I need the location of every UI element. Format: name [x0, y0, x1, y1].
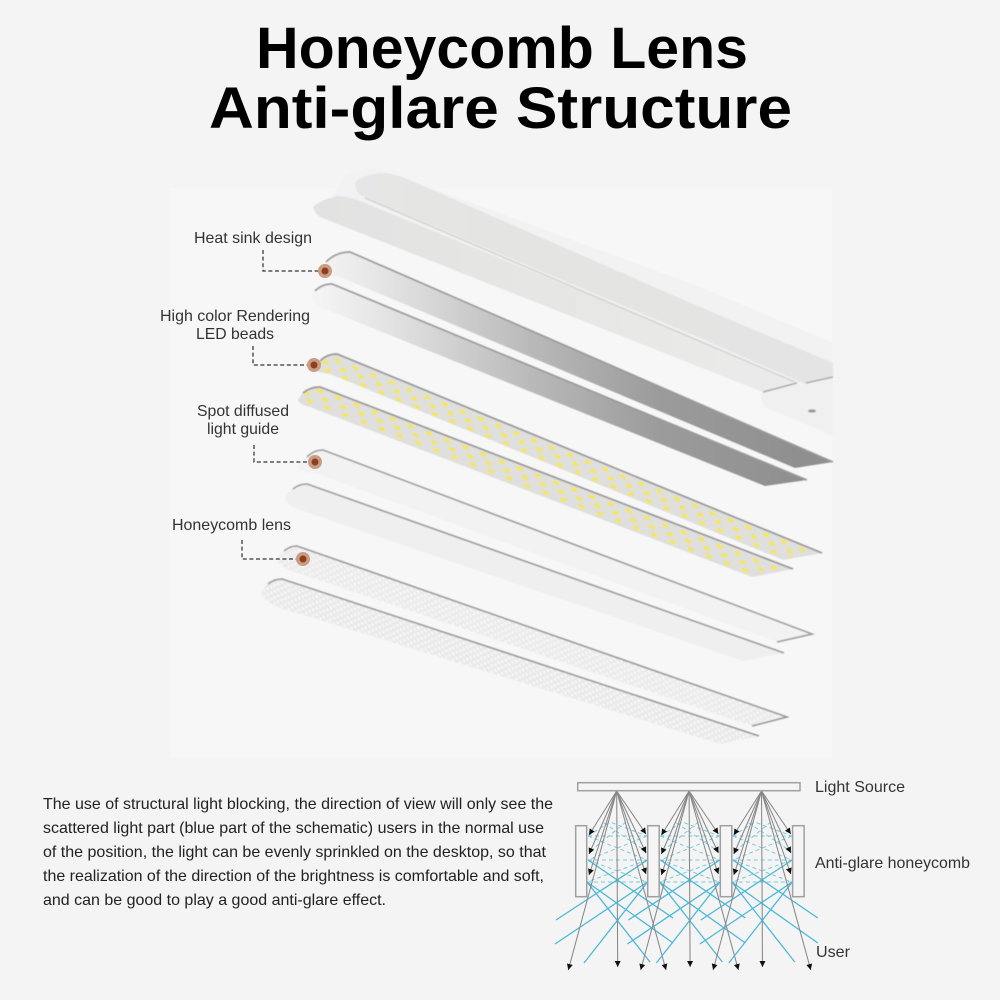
description paragraph: and can be good to play a good anti-glare effect. — [43, 892, 386, 909]
callout: LED beads: LED beads — [196, 326, 274, 343]
schematic labels: User — [816, 944, 851, 961]
callout: light guide: Spot diffused — [197, 403, 289, 420]
callout: honeycomb lens — [172, 517, 310, 566]
product image backdrop — [170, 188, 833, 758]
title — [209, 16, 792, 141]
callout: LED beads — [160, 308, 321, 372]
callout: heat sink design: Heat sink design — [194, 230, 312, 247]
title: Anti-glare Structure — [209, 76, 792, 141]
callout: heat sink design — [194, 230, 332, 278]
heat sink plate lower — [311, 284, 807, 486]
description paragraph: The use of structural light blocking, the direction of view will only see the — [43, 796, 553, 813]
heat sink plate upper — [322, 252, 833, 468]
honeycomb walls — [576, 826, 804, 897]
description paragraph — [43, 796, 553, 909]
light guide lower — [285, 484, 784, 661]
description paragraph: of the position, the light can be evenly sprinkled on the desktop, so that — [43, 844, 547, 861]
light rays — [555, 791, 818, 970]
honeycomb lens lower — [261, 579, 759, 744]
light guide upper — [298, 450, 812, 642]
exploded lamp diagram — [261, 169, 833, 744]
callout: light guide — [197, 403, 322, 469]
lamp housing — [313, 169, 833, 436]
callout: light guide: light guide — [207, 421, 279, 438]
description paragraph: the realization of the direction of the brightness is comfortable and soft, — [43, 868, 544, 885]
light path schematic — [555, 779, 970, 970]
callout: honeycomb lens: Honeycomb lens — [172, 517, 291, 534]
LED board lower — [298, 387, 793, 577]
honeycomb lens upper — [277, 546, 787, 726]
title: Honeycomb Lens — [256, 16, 748, 81]
schematic labels: Light Source — [815, 779, 905, 796]
callout: LED beads: High color Rendering — [160, 308, 310, 325]
schematic labels — [815, 779, 970, 961]
light source bar — [578, 783, 800, 791]
schematic labels: Anti-glare honeycomb — [815, 855, 970, 872]
description paragraph: scattered light part (blue part of the schematic) users in the normal use — [43, 820, 544, 837]
LED board upper — [315, 354, 822, 560]
